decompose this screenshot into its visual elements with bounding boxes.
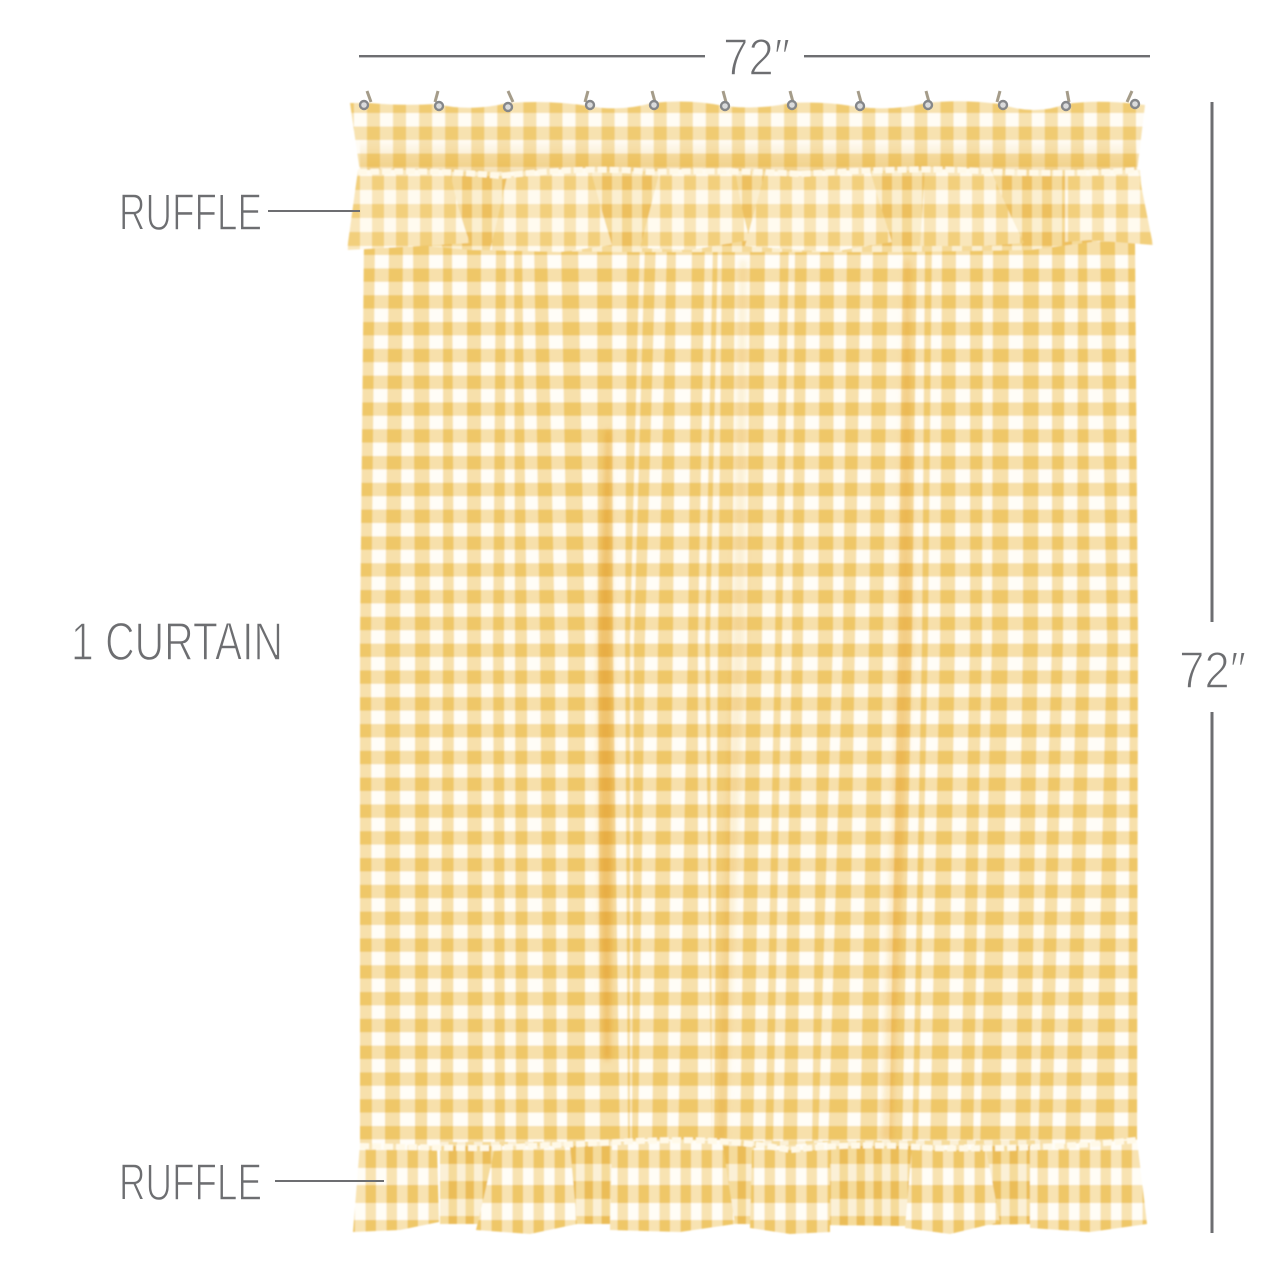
width dimension: 72 inches: 72″	[723, 29, 790, 87]
gingham curtain panel	[360, 240, 1138, 1150]
label: bottom ruffle: RUFFLE	[119, 1154, 262, 1212]
ruffle back folds	[360, 170, 1145, 252]
bottom ruffle front panels	[353, 1140, 1147, 1234]
ruffle front panels	[347, 168, 1153, 252]
top ruffle	[347, 168, 1153, 252]
height dimension: 72 inches	[1179, 102, 1246, 1233]
height dimension: 72 inches: 72″	[1179, 642, 1246, 700]
bottom ruffle back folds	[440, 1140, 1040, 1226]
header band shading	[360, 140, 1137, 172]
top header band	[350, 101, 1145, 172]
bottom ruffle	[353, 1140, 1147, 1234]
curtain hooks	[360, 91, 1139, 111]
label: top ruffle: RUFFLE	[119, 184, 262, 242]
curtain	[347, 101, 1153, 1234]
label: 1 curtain: 1 CURTAIN	[71, 612, 283, 672]
